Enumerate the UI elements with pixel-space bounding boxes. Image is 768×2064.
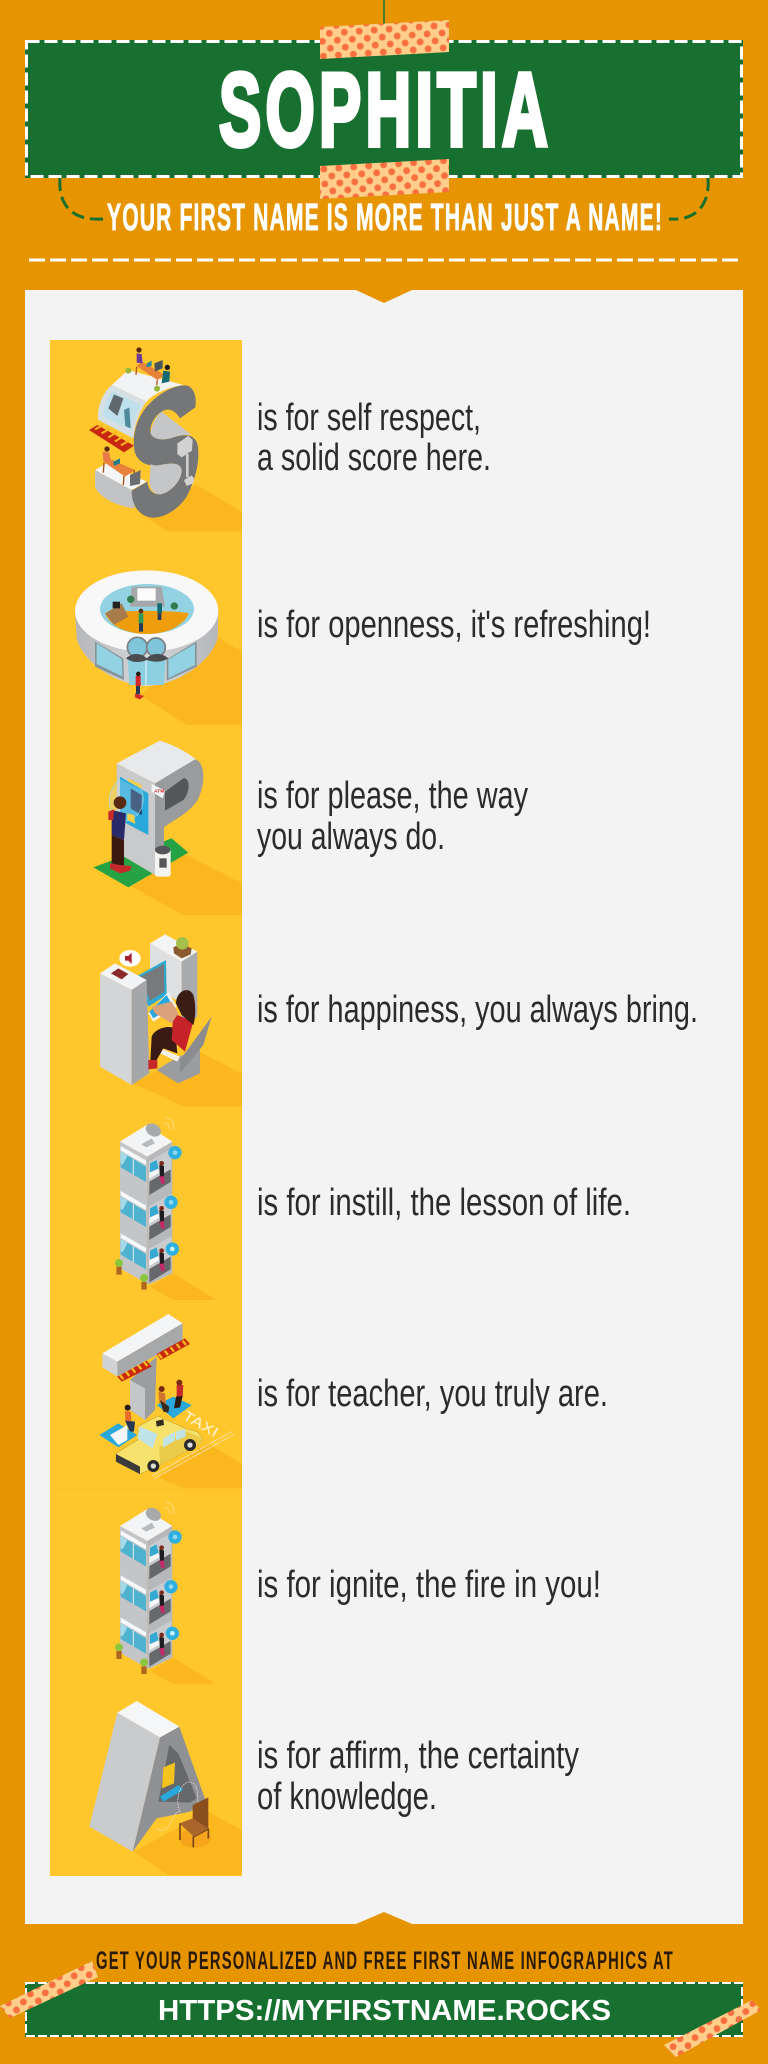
tape: banner top bbox=[320, 20, 449, 59]
hanging thread bbox=[383, 0, 385, 25]
left dashed bracket bbox=[60, 178, 103, 219]
right dashed bracket bbox=[669, 178, 708, 219]
row 7 text: is for ignite, the fire in you! bbox=[257, 1564, 601, 1606]
footer banner bbox=[25, 1982, 743, 2037]
icon: second letter I building bbox=[115, 1502, 217, 1684]
footer url: HTTPS://MYFIRSTNAME.ROCKS bbox=[158, 1995, 611, 2027]
row 8 text: is for affirm, the certainty bbox=[257, 1735, 579, 1777]
yellow illustration strip bbox=[50, 340, 242, 1876]
icon: letter O building bbox=[75, 570, 242, 725]
row 5 text: is for instill, the lesson of life. bbox=[257, 1182, 631, 1224]
row 8 text bbox=[257, 1735, 579, 1818]
header banner bbox=[25, 40, 743, 178]
icon: letter P building bbox=[93, 741, 242, 915]
row 8 text: of knowledge. bbox=[257, 1776, 437, 1818]
icon: letter P building: ATM bbox=[154, 789, 164, 795]
tape: banner bottom bbox=[320, 159, 449, 199]
icon: letter A building bbox=[89, 1701, 242, 1875]
icon: letter S building bbox=[89, 347, 242, 532]
row 3 text bbox=[257, 775, 528, 858]
row 3 text: is for please, the way bbox=[257, 775, 528, 817]
icon: letter I building bbox=[115, 1117, 217, 1300]
icon: letter T building bbox=[52, 1314, 242, 1490]
icon: letter H building bbox=[100, 934, 242, 1107]
dashed divider bbox=[29, 258, 739, 262]
row 2 text: is for openness, it's refreshing! bbox=[257, 604, 651, 646]
row 1 text: a solid score here. bbox=[257, 437, 491, 479]
row 3 text: you always do. bbox=[257, 816, 445, 858]
icon: letter T building: TAXI bbox=[180, 1407, 221, 1440]
row 1 text: is for self respect, bbox=[257, 397, 481, 439]
tape: footer right bbox=[664, 2000, 761, 2057]
main panel bbox=[25, 290, 743, 1924]
row 1 text bbox=[257, 397, 491, 479]
row 6 text: is for teacher, you truly are. bbox=[257, 1373, 608, 1415]
name title: SOPHITIA bbox=[219, 52, 552, 168]
tape: footer left bbox=[0, 1961, 98, 2018]
